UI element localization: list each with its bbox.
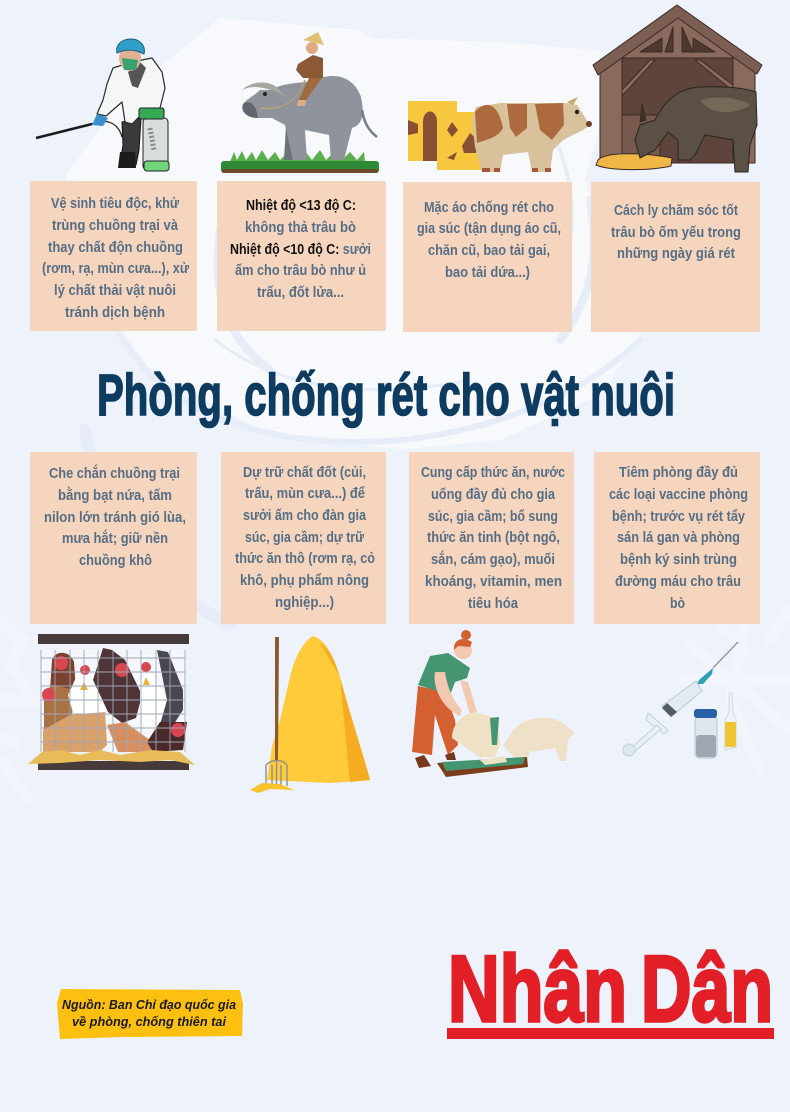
- text: Mặc áo chống rét cho: [424, 200, 554, 216]
- icon: farmer feeding pig: [412, 630, 575, 777]
- text: mưa hắt; giữ nền: [62, 529, 168, 547]
- text: gia súc (tận dụng áo cũ,: [417, 221, 561, 237]
- text: những ngày giá rét: [617, 246, 735, 262]
- text: Cung cấp thức ăn, nước: [421, 465, 565, 481]
- text: thức ăn tinh (bột ngô,: [427, 530, 560, 546]
- box: [217, 181, 386, 331]
- text: [44, 464, 186, 569]
- text: Nhiệt độ <13 độ C:: [246, 198, 356, 214]
- icon: farmer on buffalo: [221, 32, 379, 173]
- text: trấu, mùn cưa...) để: [245, 486, 365, 502]
- text: sưởi ấm cho đàn gia: [243, 508, 367, 524]
- background brush swirl: [66, 18, 640, 625]
- text: bao tải dứa...): [445, 265, 530, 281]
- text: bò: [670, 596, 685, 612]
- text: sắn, cám gạo), muối: [431, 550, 555, 568]
- box: [403, 182, 572, 332]
- background snowflake left: [0, 620, 42, 800]
- text: các loại vaccine phòng: [609, 487, 748, 503]
- box: [409, 452, 574, 624]
- text: súc, gia cầm; dự trữ: [245, 530, 364, 546]
- text: (rơm, rạ, mùn cưa...), xử: [42, 261, 189, 277]
- text: [42, 196, 189, 321]
- text: tránh dịch bệnh: [65, 305, 165, 321]
- background snowflake right: [680, 610, 790, 770]
- text: [609, 465, 748, 612]
- text: bệnh ký sinh trùng: [620, 552, 737, 568]
- text: [230, 198, 371, 301]
- text: tiêu hóa: [468, 596, 519, 612]
- text: súc, gia cầm; bổ sung: [428, 509, 558, 525]
- text: nilon lớn tránh gió lùa,: [44, 510, 186, 526]
- text: sán lá gan và phòng: [617, 530, 740, 546]
- text: Vệ sinh tiêu độc, khử: [51, 196, 179, 212]
- tag background: [57, 989, 243, 1039]
- source text: [62, 997, 236, 1029]
- text: trấu, đốt lửa...: [257, 285, 344, 301]
- icon: haystack with fork: [250, 636, 370, 793]
- panel: isolation: [591, 182, 760, 332]
- panel: fuel storage: [221, 452, 386, 624]
- box: [591, 182, 760, 332]
- icon: disinfection worker: [36, 39, 169, 171]
- box: [30, 181, 197, 331]
- text: uống đầy đủ cho gia: [431, 487, 556, 503]
- panel: temperature: [217, 181, 386, 331]
- text: Tiêm phòng đầy đủ: [619, 465, 738, 481]
- text: [421, 465, 565, 612]
- text: bệnh; trước vụ rét tẩy: [612, 509, 745, 525]
- text: lý chất thải vật nuôi: [54, 283, 176, 299]
- text: trâu bò ốm yếu trong: [611, 225, 741, 241]
- panel: vaccine: [594, 452, 760, 624]
- text: thức ăn thô (rơm rạ, cỏ: [235, 551, 375, 567]
- text: Che chắn chuồng trại: [49, 464, 180, 482]
- text: Nhiệt độ <10 độ C: sưởi: [230, 242, 371, 258]
- text: ấm cho trâu bò như ủ: [235, 263, 366, 279]
- text: [417, 200, 561, 281]
- icon: cow with coat: [408, 97, 592, 172]
- icon: barn with buffalo: [593, 5, 762, 172]
- panel: disinfection: [30, 181, 197, 331]
- text: [235, 465, 375, 611]
- text: nghiệp...): [275, 595, 334, 611]
- text: khoáng, vitamin, men: [425, 574, 562, 590]
- text: chăn cũ, bao tải gai,: [428, 243, 550, 259]
- box: [594, 452, 760, 624]
- text: Dự trữ chất đốt (củi,: [243, 465, 366, 481]
- panel: feed: [409, 452, 574, 624]
- source tag: [57, 989, 243, 1039]
- text: đường máu cho trâu: [615, 574, 741, 590]
- text: khô, phụ phẩm nông: [240, 573, 369, 589]
- box: [30, 452, 197, 624]
- source text: Nguồn: Ban Chỉ đạo quốc gia: [62, 997, 236, 1012]
- text: Cách ly chăm sóc tốt: [614, 203, 738, 219]
- text: không thả trâu bò: [245, 220, 356, 236]
- text: bằng bạt nứa, tấm: [58, 486, 172, 504]
- icon: syringe and vials: [623, 642, 738, 758]
- text: trùng chuồng trại và: [52, 218, 179, 234]
- text: thay chất độn chuồng: [48, 240, 183, 256]
- box: [221, 452, 386, 624]
- panel: coats: [403, 182, 572, 332]
- source text: về phòng, chống thiên tai: [72, 1014, 226, 1029]
- text: chuồng khô: [79, 553, 152, 569]
- text: [611, 203, 741, 262]
- panel: shelter: [30, 452, 197, 624]
- icon: chickens in cage: [28, 634, 195, 770]
- logo: Nhan Dan: Nhân: [448, 936, 627, 1041]
